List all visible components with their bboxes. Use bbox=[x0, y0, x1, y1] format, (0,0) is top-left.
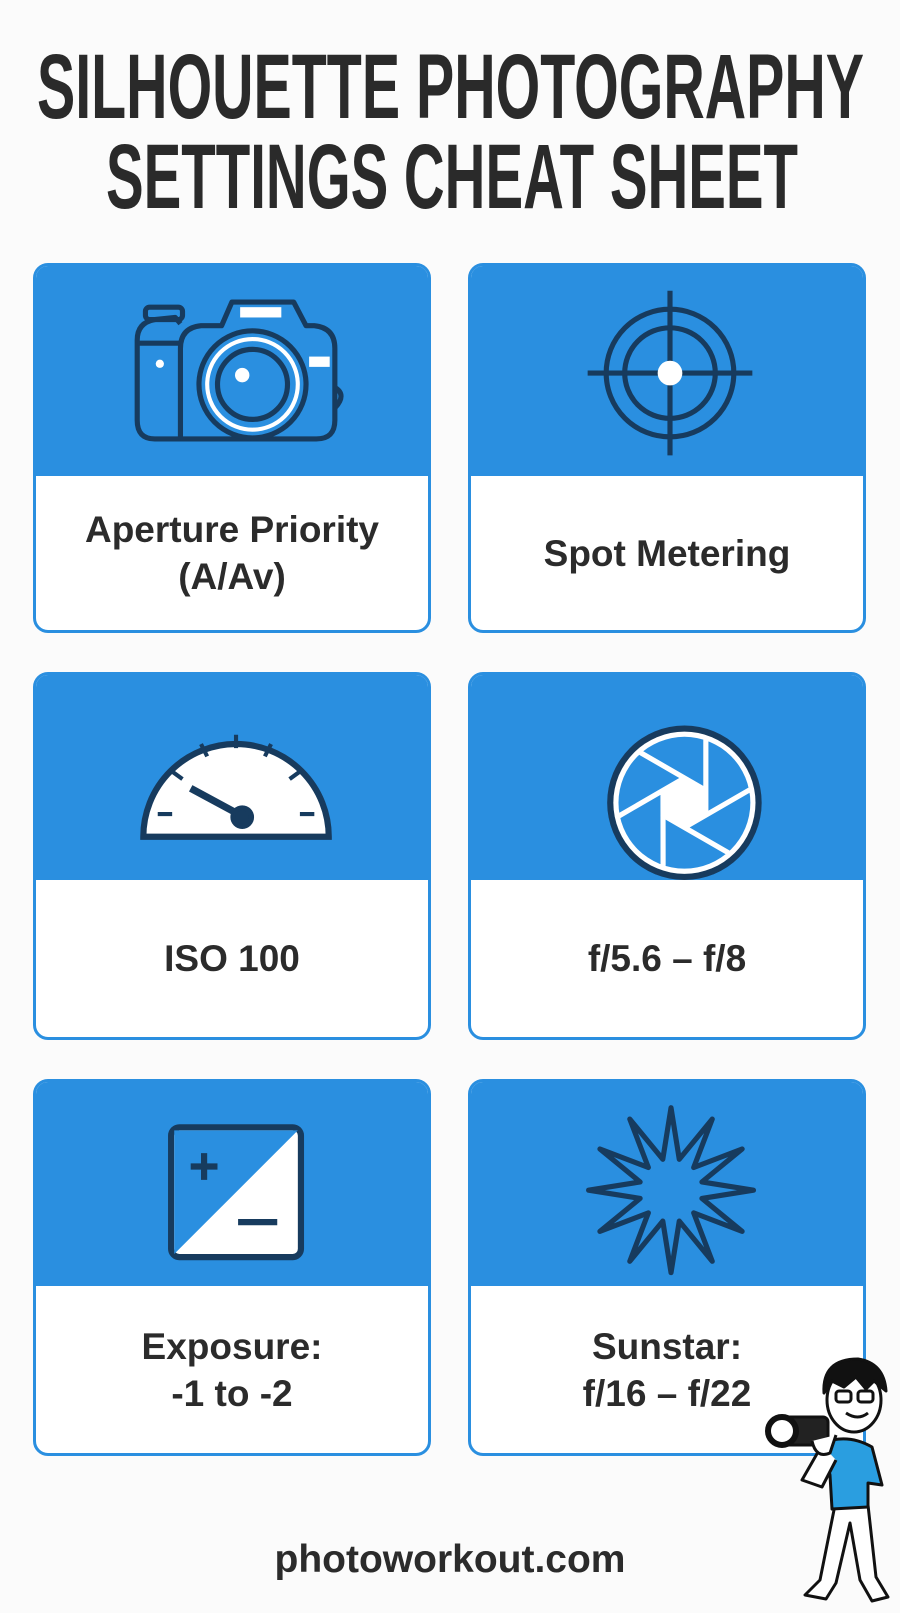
panel: aperture priority bbox=[33, 263, 431, 633]
label: aperture priority: Aperture Priority bbox=[85, 509, 379, 550]
icon: exposure compensation bbox=[36, 1082, 428, 1286]
label: ISO: ISO 100 bbox=[164, 938, 300, 979]
label: aperture range: f/5.6 – f/8 bbox=[588, 938, 746, 979]
panel: ISO bbox=[33, 672, 431, 1040]
label: aperture priority: (A/Av) bbox=[178, 556, 286, 597]
panel: aperture range bbox=[468, 672, 866, 1040]
label: sunstar bbox=[583, 1326, 751, 1414]
icon: gauge bbox=[36, 675, 428, 880]
icon: photographer character bbox=[765, 1358, 890, 1602]
label: exposure bbox=[142, 1326, 322, 1414]
icon: target bbox=[471, 266, 863, 476]
icon: camera bbox=[36, 266, 428, 476]
panel: exposure bbox=[33, 1079, 431, 1456]
title bbox=[37, 36, 864, 228]
icon: starburst bbox=[471, 1082, 863, 1286]
footer: website: photoworkout.com bbox=[275, 1538, 625, 1581]
label: sunstar: Sunstar: bbox=[592, 1326, 742, 1366]
label: spot metering: Spot Metering bbox=[544, 532, 790, 574]
label: sunstar: f/16 – f/22 bbox=[583, 1372, 751, 1414]
panel: sunstar bbox=[468, 1079, 866, 1456]
label: exposure: -1 to -2 bbox=[171, 1372, 293, 1414]
panel: spot metering bbox=[468, 263, 866, 633]
icon: aperture blades bbox=[471, 675, 863, 880]
label: exposure: Exposure: bbox=[142, 1326, 322, 1366]
label: aperture priority bbox=[85, 509, 379, 597]
